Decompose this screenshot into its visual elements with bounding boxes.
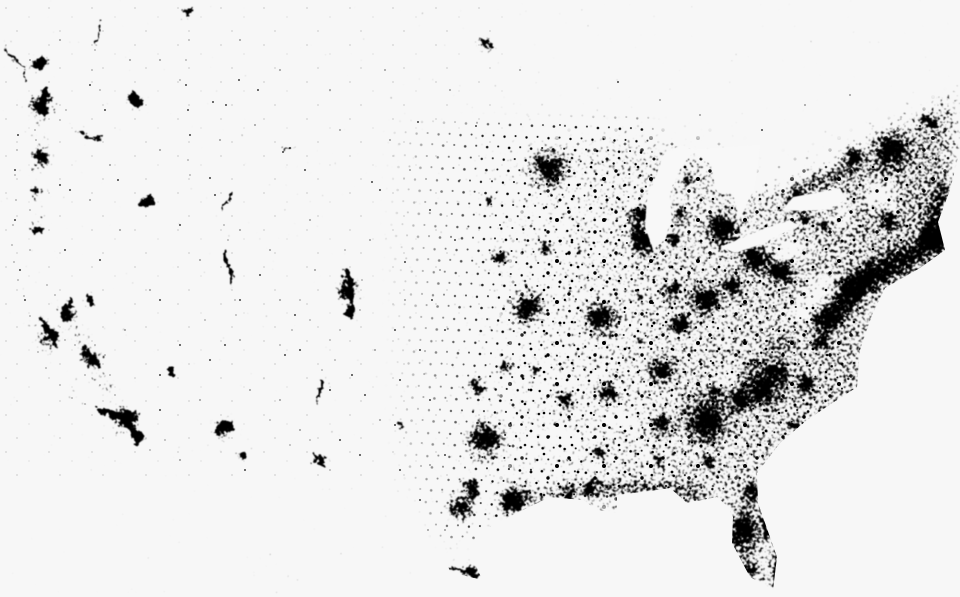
lake ontario [782, 188, 847, 211]
great lakes [645, 145, 847, 253]
sparse rural dots across the west [0, 0, 520, 480]
lake michigan [645, 145, 697, 249]
scattered town dots [12, 30, 850, 530]
midwest and south metro clusters [440, 111, 955, 579]
western metro clusters [20, 3, 498, 583]
western urban shapes [3, 22, 777, 588]
lake huron [690, 145, 760, 218]
lake erie [720, 220, 799, 253]
eastern town dots [484, 96, 956, 509]
plains settlement grid [389, 114, 855, 540]
corridors [30, 115, 945, 570]
